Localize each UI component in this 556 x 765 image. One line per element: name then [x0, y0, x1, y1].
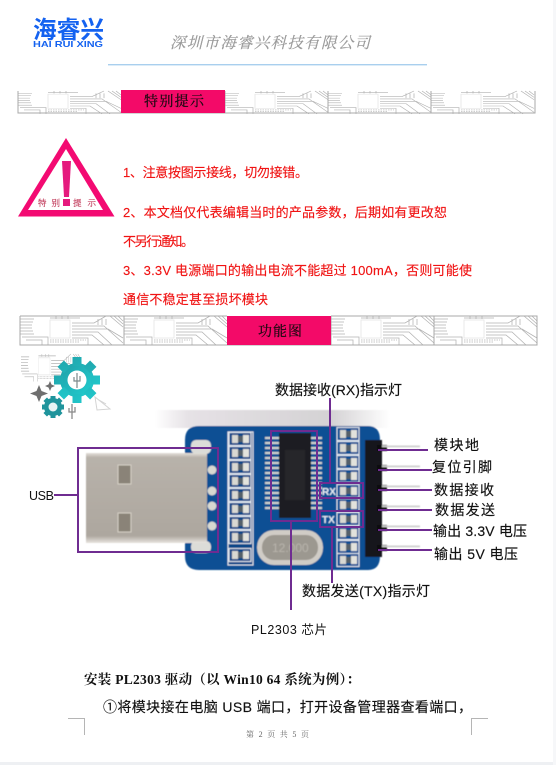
logo: HAI RUI XING	[33, 39, 103, 49]
callout labels: 数据发送(TX)指示灯	[302, 583, 430, 599]
icon: warning triangle: 提示	[73, 198, 96, 208]
callout labels: 数据接收(RX)指示灯	[275, 382, 402, 398]
photo backdrop	[155, 410, 390, 428]
callout labels	[29, 382, 527, 637]
pcb board	[185, 426, 380, 570]
module photo	[86, 410, 420, 570]
notice text: 1、注意按图示接线，切勿接错。	[123, 165, 308, 180]
rx tx silkscreen	[322, 487, 336, 526]
icon: warning triangle	[18, 138, 114, 216]
callout labels: 数据接收	[434, 482, 494, 498]
logo: 海睿兴	[33, 17, 104, 44]
section heading: install driver: 安装 PL2303 驱动（以 Win10 64 系统为例）：	[84, 671, 360, 687]
footer page number: 第 2 页 共 5 页	[246, 729, 309, 739]
left resistor column	[228, 432, 253, 565]
company name heading: 深圳市海睿兴科技有限公司	[170, 34, 372, 52]
callout labels: 输出 3.3V 电压	[433, 523, 527, 539]
notice text: 3、3.3V 电源端口的输出电流不能超过 100mA，否则可能使	[123, 263, 472, 278]
pl2303 chip	[265, 433, 322, 518]
page crop marks	[68, 718, 488, 735]
banner: function diagram	[20, 316, 537, 345]
rx tx silkscreen: RX	[322, 487, 336, 498]
rx tx silkscreen: TX	[322, 515, 335, 526]
notice text: 2、本文档仅代表编辑当时的产品参数，后期如有更改恕	[123, 205, 447, 220]
icon: gears	[21, 347, 110, 423]
banner: special notice: 特别提示	[144, 93, 205, 110]
header divider line	[108, 64, 427, 65]
callout labels: 复位引脚	[432, 459, 492, 475]
notice text: 通信不稳定甚至损坏模块	[123, 292, 268, 307]
crystal: 12.000	[272, 541, 309, 555]
right led column	[337, 428, 359, 566]
callout labels: USB	[29, 489, 54, 503]
banner: special notice	[18, 90, 535, 114]
crystal	[257, 530, 323, 565]
notice text: 不另行通知。	[123, 234, 194, 249]
pin header	[365, 440, 420, 557]
callout labels: 模块地	[434, 437, 479, 453]
icon: warning triangle: 特别	[38, 198, 60, 208]
usb plug	[86, 440, 216, 553]
callout: purple frames and leaders	[54, 398, 432, 610]
body text: ①将模块接在电脑 USB 端口，打开设备管理器查看端口，	[103, 699, 472, 715]
callout labels: 输出 5V 电压	[434, 546, 518, 562]
notice text	[123, 165, 472, 307]
banner: function diagram: 功能图	[258, 323, 302, 340]
callout labels: 数据发送	[435, 502, 495, 518]
callout labels: PL2303 芯片	[251, 623, 327, 637]
